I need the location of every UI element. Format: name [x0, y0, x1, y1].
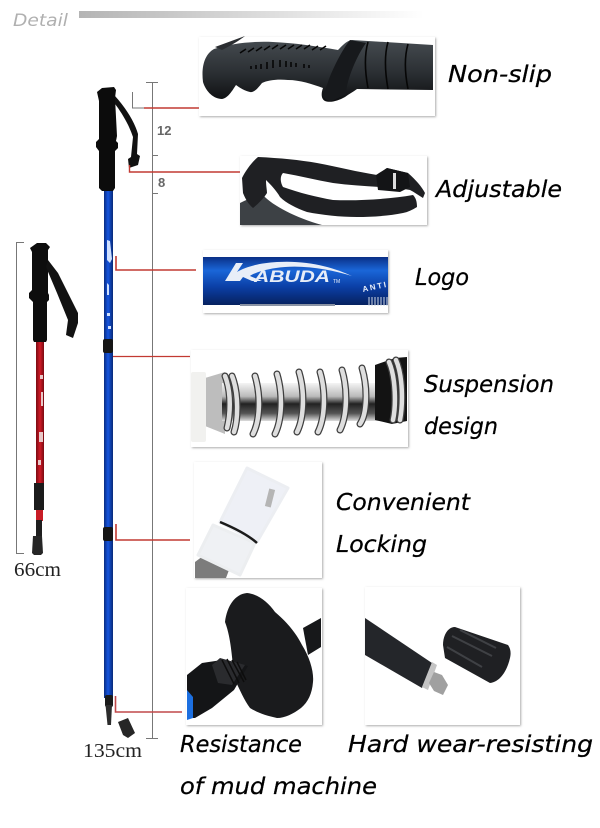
dimension scale: 12 and 8: [146, 82, 171, 738]
panel: suspension spring photo: [191, 350, 408, 447]
label: Non-slip: Non-slip: [448, 62, 552, 88]
panel: hard wear-resisting tip photo: [365, 587, 520, 725]
callout line: suspension: [113, 356, 190, 358]
label: Adjustable: Adjustable: [434, 177, 562, 203]
panel: convenient locking photo: [194, 462, 322, 578]
label: Convenient Locking: Locking: [336, 532, 427, 558]
pole: red 66cm: [29, 243, 78, 555]
label: Suspension design: Suspension: [424, 372, 554, 398]
callout line: adjustable: [130, 165, 240, 172]
label: Resistance of mud machine: [180, 732, 377, 800]
label: Logo: Logo: [415, 265, 469, 291]
heading: Detail: [13, 11, 424, 31]
callout line: non-slip red: [144, 107, 199, 109]
dimension scale: 12 and 8: 8: [158, 175, 165, 190]
dimension bracket: 66cm: [16, 242, 24, 554]
label: Hard wear-resisting: Hard wear-resisting: [348, 732, 593, 758]
label: Suspension design: [424, 372, 554, 440]
label: 135cm: 135cm: [83, 740, 142, 762]
panel: adjustable strap photo: [240, 156, 427, 225]
callout line: mud basket: [116, 696, 182, 712]
heading: Detail: Detail: [13, 11, 68, 31]
callout line: non-slip: [132, 92, 144, 108]
label: Resistance of mud machine: Resistance: [180, 732, 302, 758]
panel: logo photo: ANTI: [362, 280, 387, 294]
callout line: locking: [116, 524, 190, 540]
dimension scale: 12 and 8: 12: [157, 123, 171, 138]
label: Suspension design: design: [424, 414, 498, 440]
callout line: logo: [116, 256, 196, 270]
pole: blue 135cm: [96, 87, 140, 738]
panel: mud basket photo: [186, 588, 322, 725]
panel: non-slip grip photo: [199, 36, 435, 116]
label: 66cm: 66cm: [14, 559, 61, 581]
label: Resistance of mud machine: of mud machine: [180, 774, 377, 800]
label: Convenient Locking: Convenient: [336, 490, 471, 516]
panel: logo photo: ABUDA: [253, 267, 330, 286]
panel: logo photo: [203, 250, 388, 313]
panel: logo photo: TM: [333, 279, 340, 285]
label: Convenient Locking: [336, 490, 471, 558]
